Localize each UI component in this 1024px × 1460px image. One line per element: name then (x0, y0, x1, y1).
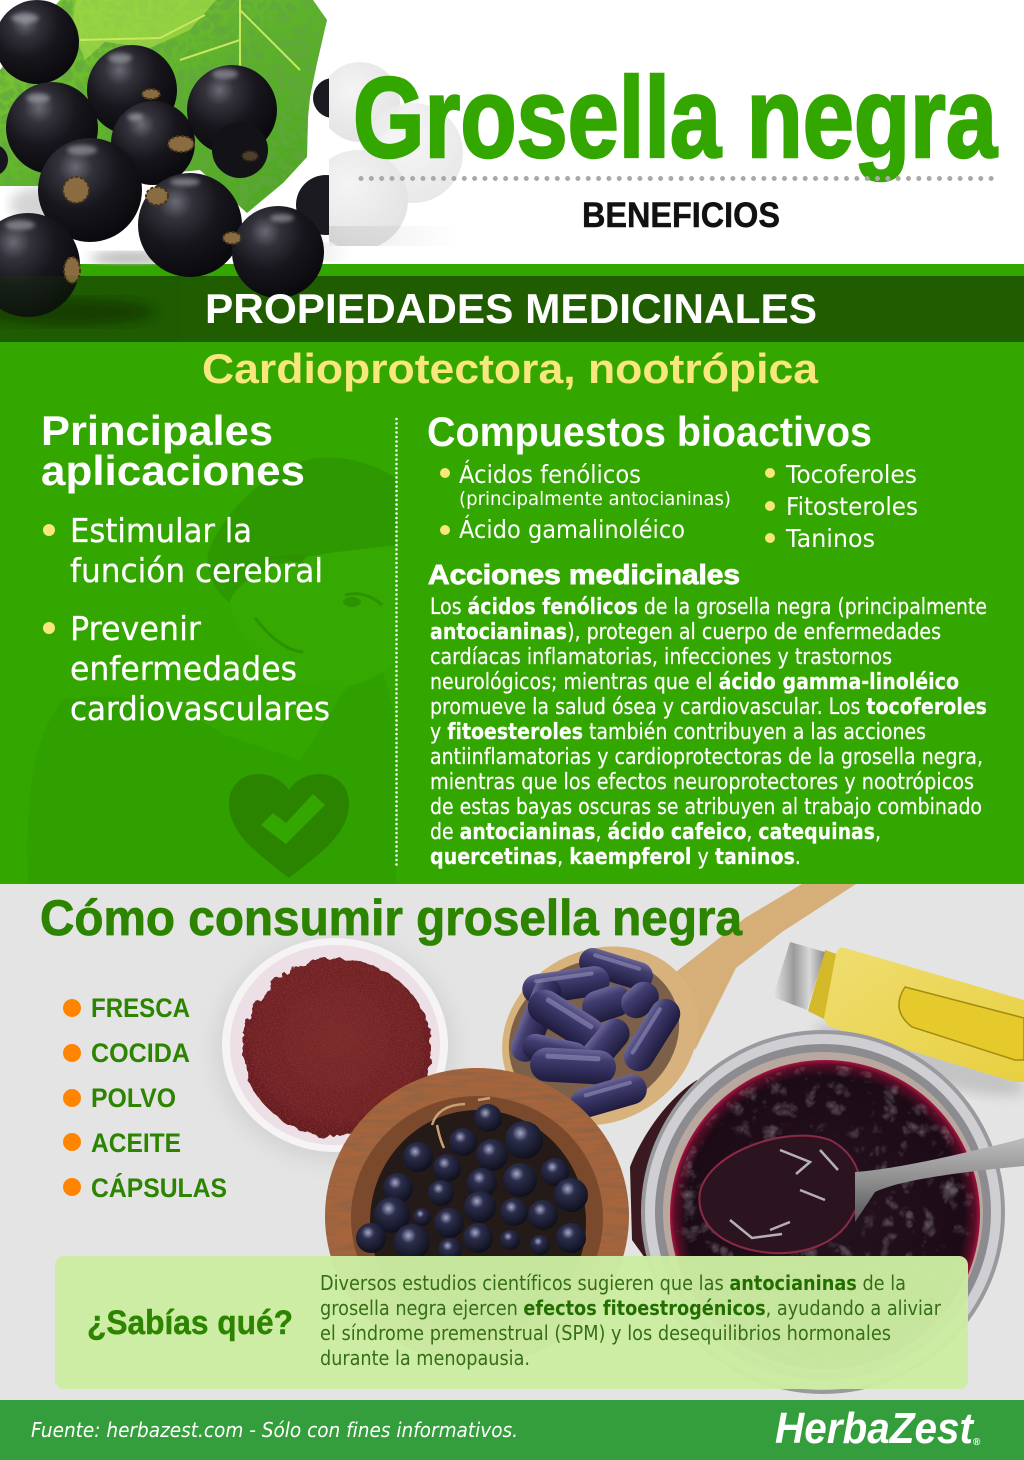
list: applications: enfermedades (70, 649, 297, 688)
list: applications (43, 511, 330, 728)
tagline: Cardioprotectora, nootrópica (202, 345, 819, 392)
list: applications: Prevenir (70, 609, 201, 648)
list: consumption forms: POLVO (91, 1083, 176, 1113)
source note: Fuente: herbazest.com - Sólo con fines informativos. (31, 1418, 518, 1442)
text block: medicinal actions: y fitoesteroles también contribuyen a las acciones (430, 720, 926, 745)
footer bar (0, 1400, 1024, 1460)
text block: medicinal actions: de antocianinas, ácido cafeico, catequinas, (430, 820, 881, 845)
list: consumption forms (63, 993, 227, 1203)
illustration: plate with powder (217, 938, 453, 1160)
heading: main applications (41, 407, 305, 494)
illustration: oil bottle (773, 942, 1024, 1110)
text block: medicinal actions: neurológicos; mientras que el ácido gamma-linoléico (430, 670, 959, 695)
list: consumption forms: CÁPSULAS (91, 1172, 227, 1203)
text block: medicinal actions: antocianinas), protegen al cuerpo de enfermedades (430, 620, 941, 645)
woman photo watermark (28, 458, 396, 884)
list: compounds: (principalmente antocianinas) (459, 488, 731, 510)
list: compounds (440, 460, 918, 553)
list: compounds: Taninos (785, 524, 875, 553)
text block: medicinal actions: quercetinas, kaempferol y taninos. (430, 845, 801, 870)
heading: bioactive compounds: Compuestos bioactivos (427, 408, 872, 455)
callout text: el síndrome premenstrual (SPM) y los desequilibrios hormonales (320, 1321, 891, 1345)
text block: medicinal actions: cardíacas inflamatorias, infecciones y trastornos (430, 645, 892, 670)
illustration: wooden bowl with berries (325, 1068, 629, 1364)
list: applications: función cerebral (70, 551, 323, 590)
list: compounds: Ácidos fenólicos (459, 460, 641, 489)
list: compounds: Ácido gamalinoléico (459, 515, 685, 544)
callout text: Diversos estudios científicos sugieren que las antocianinas de la (320, 1271, 906, 1295)
heading: main applications: Principales (41, 407, 273, 454)
title dotted divider (361, 176, 996, 181)
icon: heart with check (229, 774, 349, 878)
list: applications: Estimular la (70, 511, 252, 550)
list: consumption forms: ACEITE (91, 1128, 181, 1158)
panel: medicinal properties (0, 342, 1024, 884)
illustration: jam jar with spoon (630, 1030, 1024, 1394)
dark band for section title (0, 276, 1024, 342)
list: compounds: Tocoferoles (785, 460, 917, 489)
subtitle: BENEFICIOS (582, 196, 780, 235)
panel: how to consume background (0, 884, 1024, 1400)
translucent title panel (329, 62, 463, 246)
list: compounds: Fitosteroles (786, 492, 918, 521)
heading: medicinal actions: Acciones medicinales (428, 559, 740, 590)
heading: main applications: aplicaciones (41, 447, 305, 494)
list: consumption forms: FRESCA (91, 993, 190, 1023)
vertical dotted divider (395, 419, 398, 865)
callout text: grosella negra ejercen efectos fitoestrogénicos, ayudando a aliviar (320, 1296, 941, 1320)
callout: did you know (55, 1256, 968, 1389)
list: applications: cardiovasculares (70, 689, 330, 728)
text block: medicinal actions (430, 595, 987, 870)
callout text (320, 1271, 941, 1370)
logo: HerbaZest: HerbaZest (775, 1404, 975, 1453)
list: consumption forms: COCIDA (91, 1038, 190, 1068)
callout text: durante la menopausia. (320, 1346, 530, 1370)
heading: how to consume: Cómo consumir grosella negra (40, 890, 743, 946)
logo: HerbaZest: ® (973, 1437, 981, 1448)
illustration: blackcurrant leaf and berries (0, 0, 356, 342)
green band behind section title (0, 264, 1024, 342)
callout heading: ¿Sabías qué? (87, 1304, 293, 1342)
illustration: wooden spoon with capsules (470, 884, 856, 1159)
text block: medicinal actions: promueve la salud ósea y cardiovascular. Los tocoferoles (430, 695, 987, 720)
section heading: PROPIEDADES MEDICINALES (205, 285, 817, 332)
